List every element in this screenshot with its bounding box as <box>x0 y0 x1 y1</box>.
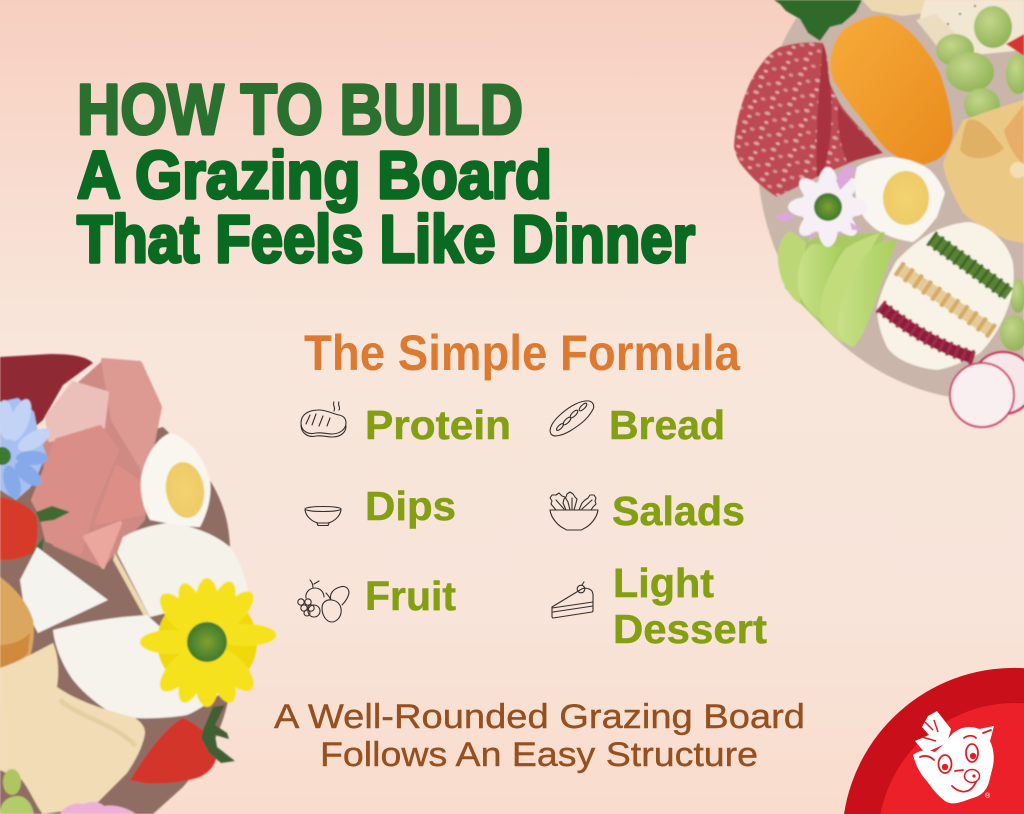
formula item: salads: Salads <box>612 488 745 534</box>
pig hat <box>915 711 951 753</box>
formula item: bread: Bread <box>609 402 725 448</box>
flower <box>775 166 868 247</box>
toast <box>0 577 34 670</box>
formula item: bread <box>550 401 725 448</box>
cheese round <box>53 615 227 718</box>
formula item: fruit <box>298 573 456 622</box>
photo: grazing board top right <box>734 0 1024 427</box>
salami <box>734 42 883 197</box>
cheese wedge small <box>20 547 108 633</box>
apple slices <box>778 232 897 347</box>
pig face lines <box>920 730 991 792</box>
strawberry bottom <box>130 705 235 784</box>
yellow flower <box>140 578 276 707</box>
registered mark: ® <box>985 792 991 800</box>
formula item: dips <box>305 483 456 529</box>
logo badge <box>844 668 1024 814</box>
icon: cake slice <box>552 582 593 618</box>
egg <box>141 433 211 527</box>
bread <box>943 100 1024 243</box>
carrot cheese <box>830 15 953 166</box>
formula item: salads <box>550 488 745 534</box>
icon: bowl <box>305 506 341 526</box>
crackers <box>862 0 1024 56</box>
formula item: light dessert <box>552 560 767 652</box>
cheese wedge large <box>117 523 248 617</box>
formula item: light dessert: Dessert <box>613 606 767 652</box>
closing text <box>274 698 805 774</box>
pig mascot <box>913 711 994 803</box>
title line 1: HOW TO BUILD <box>77 71 523 150</box>
strawberry left <box>0 497 38 560</box>
grapes <box>936 6 1024 351</box>
closing line 2: Follows An Easy Structure <box>320 736 758 774</box>
formula item: protein: Protein <box>365 402 511 448</box>
photo: grazing board bottom left <box>0 354 276 814</box>
icon: baguette <box>550 401 594 436</box>
formula item: fruit: Fruit <box>365 573 456 619</box>
subheading: The Simple Formula <box>304 325 741 381</box>
blue flower <box>0 396 54 500</box>
cured ham <box>0 354 93 430</box>
radishes <box>950 352 1024 427</box>
inner red circle <box>880 703 1024 814</box>
prosciutto <box>33 360 160 568</box>
grapes and petal at bottom <box>0 769 136 814</box>
title <box>77 71 695 277</box>
strawberry top <box>1006 34 1024 56</box>
closing line 1: A Well-Rounded Grazing Board <box>274 698 805 736</box>
formula item: dips: Dips <box>365 483 456 529</box>
pig head <box>913 726 994 803</box>
title line 2: A Grazing Board <box>77 138 552 213</box>
icon: steak <box>301 402 346 437</box>
icon: fruits <box>298 580 349 622</box>
icon: salad bowl <box>550 492 598 530</box>
wooden board <box>0 427 234 814</box>
formula item: protein <box>301 402 511 448</box>
stripe cheese <box>877 222 1014 370</box>
title line 3: That Feels Like Dinner <box>77 202 695 277</box>
parsley <box>774 0 862 41</box>
formula item: light dessert: Light <box>613 560 714 606</box>
outer red circle <box>844 668 1024 814</box>
flatbread <box>0 643 145 814</box>
egg <box>855 157 945 242</box>
wooden board <box>757 0 1024 401</box>
